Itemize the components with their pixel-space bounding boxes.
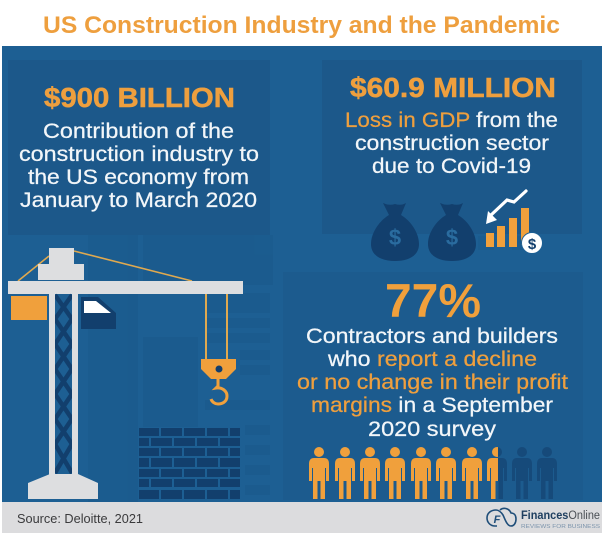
GDP loss description: due to Covid-19 — [372, 155, 531, 178]
$900 billion description: construction industry to — [19, 143, 259, 166]
survey description: Contractors and builders — [306, 325, 558, 348]
icon: money bag 1 — [371, 203, 419, 261]
title: US Construction Industry and the Pandemic — [43, 12, 560, 39]
icon: money bag 2: $ — [446, 225, 458, 250]
FinancesOnline logo: FinancesOnline — [521, 510, 600, 522]
GDP loss description — [345, 109, 558, 178]
survey description: margins in a September — [311, 394, 553, 417]
FinancesOnline logo — [487, 508, 600, 530]
FinancesOnline logo: REVIEWS FOR BUSINESS — [521, 524, 600, 530]
panel: $60.9 million — [322, 60, 582, 234]
survey description: who report a decline — [327, 348, 537, 371]
crane cab — [81, 297, 116, 329]
GDP loss description: Loss in GDP from the — [345, 109, 558, 132]
icon: declining bar chart: $ — [528, 236, 537, 253]
footer bar — [2, 502, 602, 533]
FinancesOnline logo: F — [494, 514, 501, 526]
77% figure: 77% — [385, 274, 481, 327]
$900 billion figure: $900 BILLION — [44, 82, 235, 113]
crane — [8, 248, 243, 499]
$900 billion description: Contribution of the — [43, 120, 234, 143]
crane hook — [201, 359, 236, 404]
survey description: or no change in their profit — [297, 371, 568, 394]
icon: money bag 2 — [428, 203, 476, 261]
panel: $900 billion — [8, 60, 270, 235]
survey description — [297, 325, 568, 441]
panel: 77% — [283, 272, 583, 500]
source note: Source: Deloitte, 2021 — [17, 512, 143, 526]
$900 billion description: January to March 2020 — [20, 189, 257, 212]
GDP loss description: construction sector — [355, 132, 549, 155]
$900 billion description: the US economy from — [28, 166, 249, 189]
people pictogram: 77 percent — [309, 447, 557, 499]
icon: declining bar chart — [486, 191, 542, 254]
brick wall — [139, 428, 240, 499]
$60.9 million figure: $60.9 MILLION — [350, 72, 556, 103]
icon: money bag 1: $ — [389, 225, 401, 250]
$900 billion description — [19, 120, 259, 212]
survey description: 2020 survey — [368, 418, 497, 441]
